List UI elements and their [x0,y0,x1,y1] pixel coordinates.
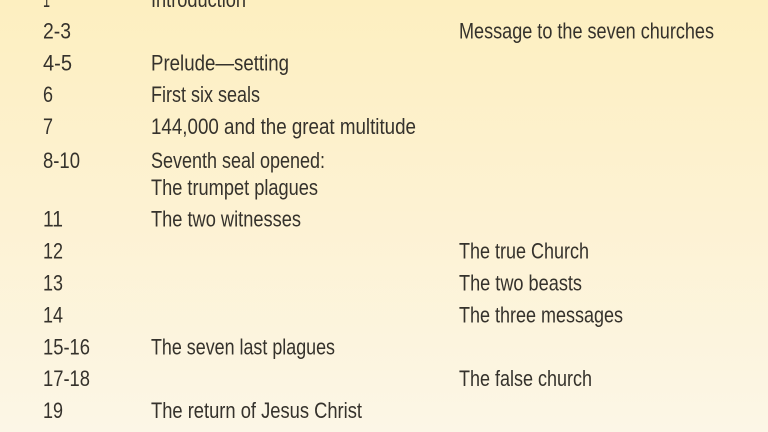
column: events: Prelude—setting [151,50,289,76]
column: church topics: The true Church [459,238,589,264]
column: events: The return of Jesus Christ [151,398,363,423]
column: events: 144,000 and the great multitude [151,114,416,139]
column: chapter numbers [43,0,90,423]
column: chapter numbers: 12 [43,238,63,264]
column: chapter numbers: 8-10 [43,148,80,173]
column: chapter numbers: 14 [43,302,63,328]
column: church topics: The three messages [459,302,623,328]
column: events: First six seals [151,82,260,107]
column: church topics [459,18,714,391]
column: chapter numbers: 15-16 [43,334,90,360]
column: chapter numbers: 19 [43,398,63,423]
column: events: The two witnesses [151,206,301,232]
column: chapter numbers: 2-3 [43,18,71,44]
column: chapter numbers: 6 [43,82,53,107]
column: church topics: The false church [459,366,592,391]
column: events: The seven last plagues [151,334,335,360]
column: chapter numbers: 13 [43,270,63,296]
column: events: The trumpet plagues [151,175,318,200]
column: events: Seventh seal opened: [151,148,325,173]
column: church topics: The two beasts [459,270,582,296]
column: chapter numbers: 11 [43,206,63,232]
column: chapter numbers: 4-5 [43,50,72,76]
column: church topics: Message to the seven churches [459,18,714,44]
column: chapter numbers: 17-18 [43,366,90,391]
column: chapter numbers: 7 [43,114,53,139]
column: events [151,0,416,423]
